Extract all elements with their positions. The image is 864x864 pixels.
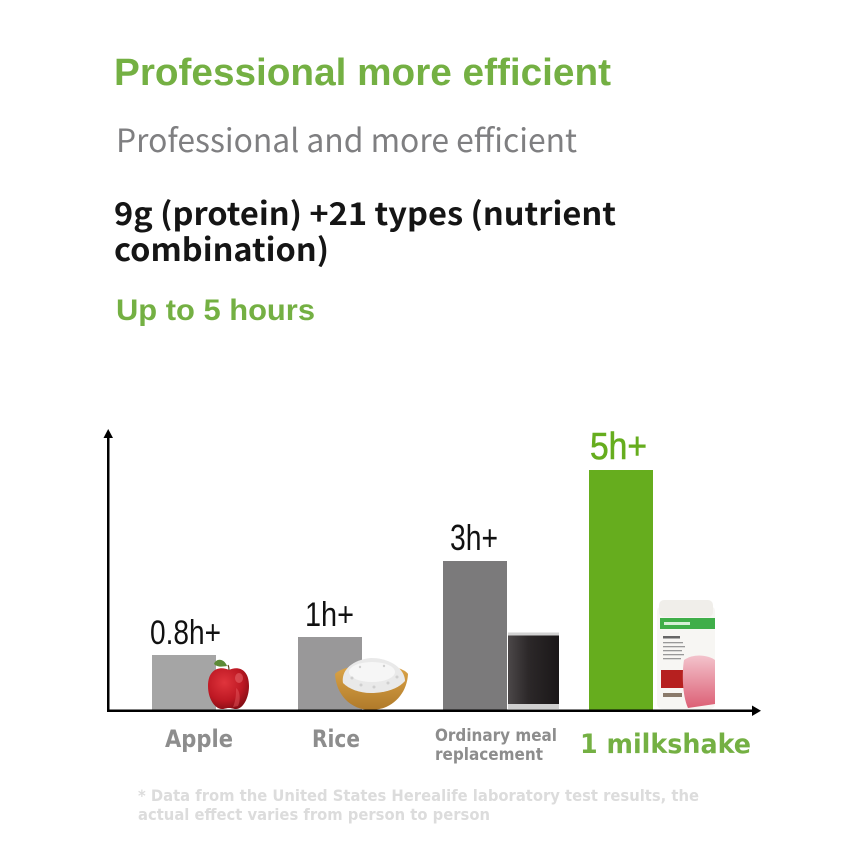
label: ordinary meal replacement: replacement (435, 745, 543, 765)
nutrient statement: 9g (protein) +21 types (nutrient (114, 189, 616, 234)
bar: ordinary meal replacement (443, 561, 507, 710)
value: apple: 0.8h+ (150, 614, 221, 652)
duration callout: Up to 5 hours (116, 294, 315, 327)
value: ordinary meal replacement: 3h+ (450, 517, 498, 558)
footnote (138, 786, 699, 824)
subtitle: Professional and more efficient (116, 116, 577, 162)
value: rice: 1h+ (305, 596, 354, 634)
nutrient statement: combination) (114, 225, 329, 270)
bar: rice (298, 637, 362, 710)
label: apple: Apple (165, 725, 233, 753)
footnote: actual effect varies from person to person (138, 805, 490, 824)
label: rice: Rice (312, 725, 360, 753)
footnote: * Data from the United States Herealife laboratory test results, the (138, 786, 699, 805)
label: ordinary meal replacement: Ordinary meal (435, 726, 557, 746)
y axis arrow (104, 429, 113, 711)
icon: can (508, 632, 559, 709)
label: milkshake: 1 milkshake (580, 729, 751, 760)
title: Professional more efficient (114, 52, 611, 94)
icon: apple (208, 660, 249, 709)
icon: shake jar (657, 600, 715, 709)
icon: rice bowl (335, 658, 408, 710)
bar: apple (152, 655, 216, 710)
bar chart (104, 426, 761, 765)
nutrient statement (114, 189, 616, 270)
bar: milkshake (589, 470, 653, 710)
x axis arrow (107, 706, 761, 716)
label: ordinary meal replacement (435, 726, 557, 765)
value: milkshake: 5h+ (590, 426, 647, 468)
